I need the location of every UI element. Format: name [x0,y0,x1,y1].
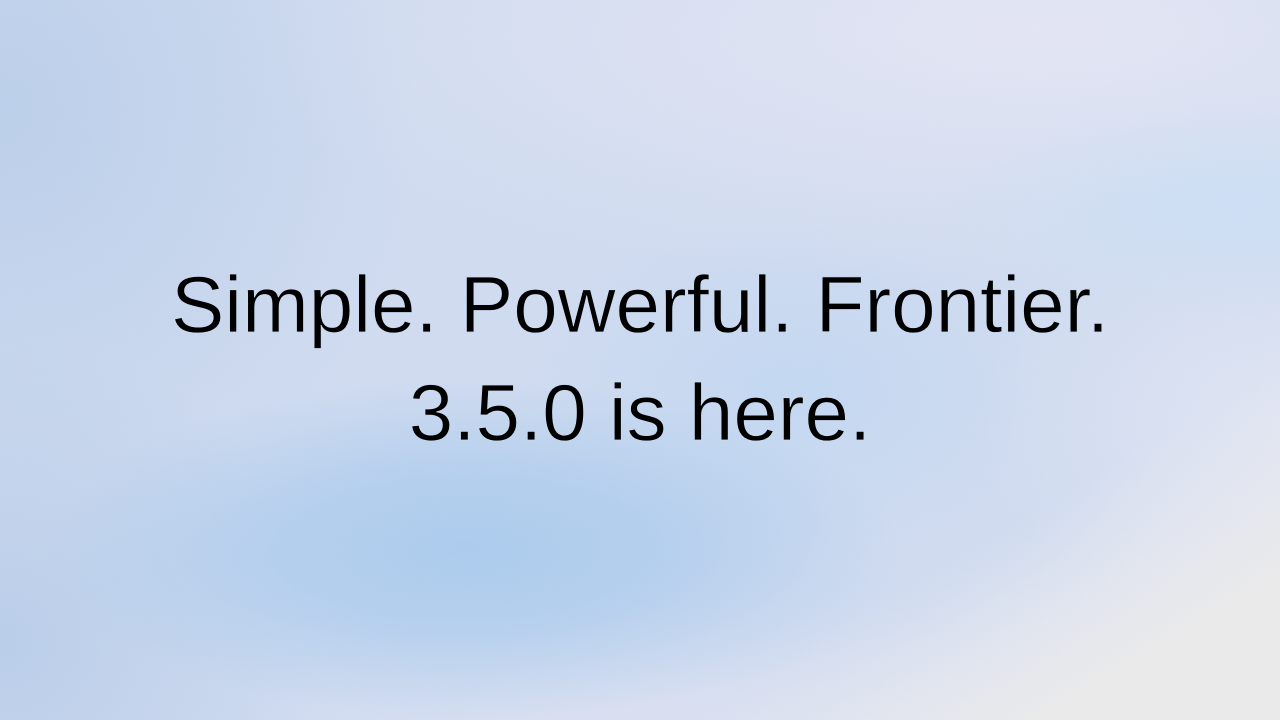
title: Simple. Powerful. Frontier. [171,260,1109,349]
title: 3.5.0 is here. [409,368,871,457]
title [171,260,1109,457]
